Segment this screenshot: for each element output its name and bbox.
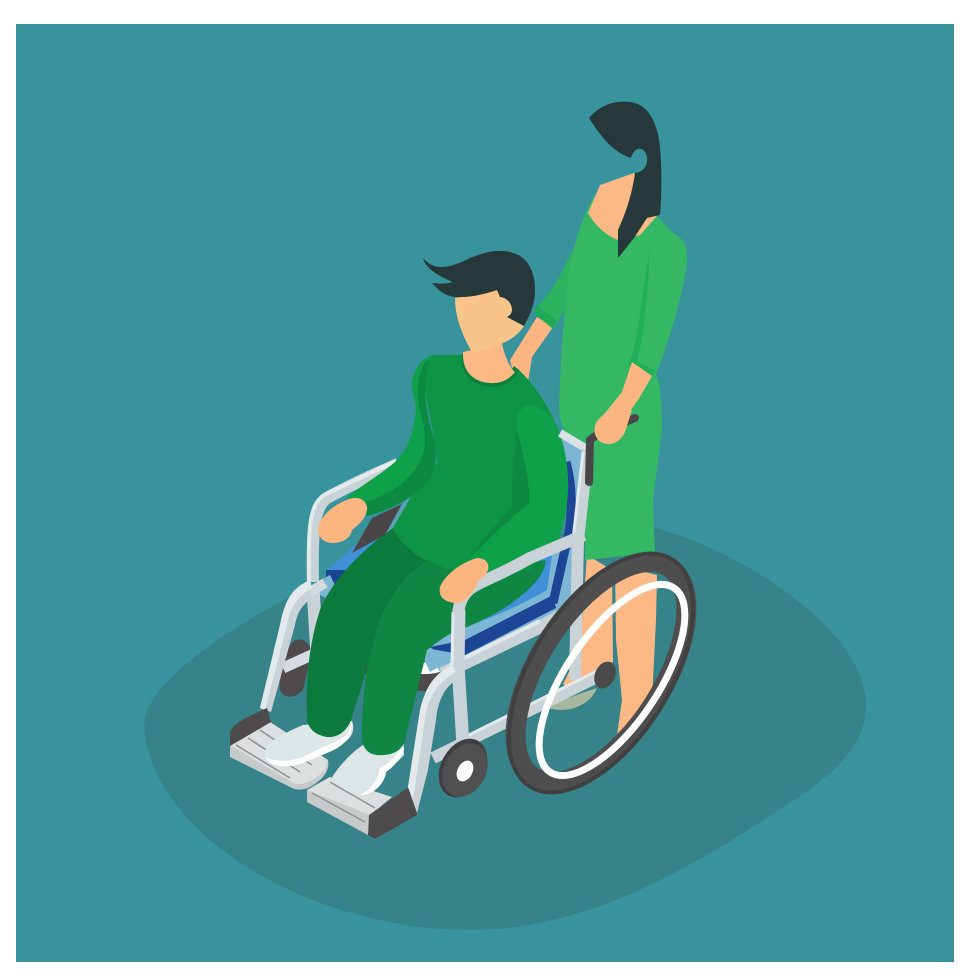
left hand	[318, 498, 367, 543]
ground shadow blob	[144, 528, 866, 930]
right armrest	[458, 535, 584, 615]
backrest top and post	[560, 433, 587, 449]
right bumper	[368, 788, 417, 839]
lower bar	[433, 677, 597, 758]
man: collar	[462, 354, 519, 387]
right hand	[440, 558, 488, 603]
woman forearm	[606, 362, 652, 425]
push handle	[589, 418, 635, 482]
small caster wheel	[429, 730, 497, 806]
woman legs	[547, 555, 657, 745]
big wheel	[471, 523, 731, 823]
seat rail	[442, 602, 585, 674]
woman hair	[589, 102, 661, 258]
woman's hand on handle	[595, 410, 632, 444]
left bumper	[230, 708, 271, 746]
right shoe	[332, 738, 404, 795]
front post	[458, 610, 463, 745]
hub	[590, 658, 620, 692]
front leg	[408, 665, 460, 813]
back dark band	[553, 462, 571, 603]
man: neck	[463, 343, 515, 383]
woman dress	[559, 192, 687, 560]
seat cushion	[423, 500, 560, 640]
woman near sleeve	[629, 236, 687, 377]
seat dark strip	[425, 595, 556, 655]
near thigh and leg	[362, 560, 545, 755]
man: far arm	[347, 355, 436, 516]
rear left wheel	[280, 639, 312, 697]
armrest dark pad	[352, 504, 402, 553]
woman far arm	[510, 250, 575, 382]
man: face	[455, 290, 524, 352]
wheelchair rear parts	[260, 433, 587, 712]
man: legs	[307, 528, 545, 755]
figure: woman	[510, 102, 687, 745]
man: torso	[393, 355, 568, 578]
man: near arm	[470, 405, 568, 575]
left front leg	[260, 580, 312, 712]
woman neck	[588, 173, 657, 240]
wheelchair footrests and shoes	[230, 708, 417, 839]
left footrest	[230, 722, 328, 790]
tire dark edge	[471, 523, 731, 823]
backrest panel	[422, 433, 587, 672]
left frame	[283, 461, 398, 668]
right footrest	[307, 777, 390, 835]
rear right wheel arc between legs	[357, 650, 440, 692]
left shoe	[265, 721, 353, 767]
far thigh and leg	[307, 528, 427, 737]
hand rim	[512, 562, 712, 798]
tire	[481, 534, 721, 810]
man: hair	[423, 251, 535, 326]
wheelchair front frame	[433, 433, 597, 758]
left seat cushion	[325, 535, 420, 610]
